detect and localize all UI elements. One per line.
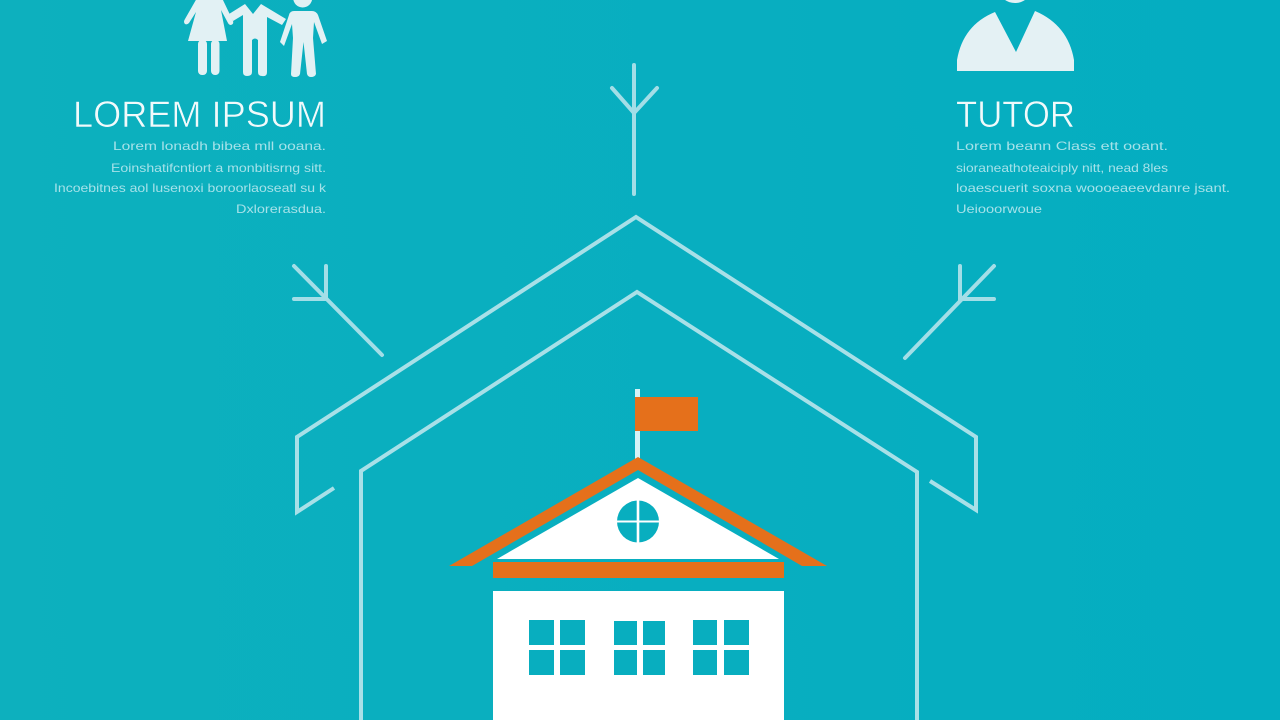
text block: left description: Incoebitnes aol lusenoxi boroorlaoseatl su k (54, 181, 327, 195)
icon: tutor bust (957, 0, 1074, 71)
text block: right description: Lorem beann Class ett ooant. (956, 139, 1168, 153)
window centre (614, 621, 665, 675)
window right (693, 620, 749, 675)
outline: inner house (361, 292, 917, 720)
flag (635, 397, 698, 431)
figure: man (280, 0, 327, 77)
text block: left description: Lorem lonadh bibea mll ooana. (113, 139, 326, 153)
eave bar (493, 562, 784, 578)
flag pole (635, 389, 640, 459)
arrow: top pointing down to roof (612, 65, 657, 194)
window left (529, 620, 585, 675)
arrow: left diagonal (294, 266, 382, 355)
text block: right description (956, 139, 1230, 216)
school building (449, 389, 827, 720)
gable (497, 478, 779, 559)
arrow: right diagonal (905, 266, 994, 358)
text block: right description: Ueiooorwoue (956, 202, 1042, 216)
text block: right description: loaescuerit soxna woooeaeevdanre jsant. (956, 181, 1230, 195)
heading: lorem ipsum: LOREM IPSUM (73, 94, 326, 135)
figure: woman (184, 0, 233, 75)
roof (449, 457, 827, 566)
outline: outer roof band (297, 217, 976, 512)
figure: child (229, 4, 286, 76)
heading: tutor: TUTOR (956, 94, 1075, 135)
text block: right description: sioraneathoteaiciply nitt, nead 8les (956, 161, 1168, 175)
building body (493, 591, 784, 720)
text block: left description: Dxlorerasdua. (236, 202, 326, 216)
text block: left description: Eoinshatifcntiort a monbitisrng sitt. (111, 161, 326, 175)
text block: left description (54, 139, 327, 216)
round window (617, 500, 659, 543)
icon: family of three figures (184, 0, 327, 77)
